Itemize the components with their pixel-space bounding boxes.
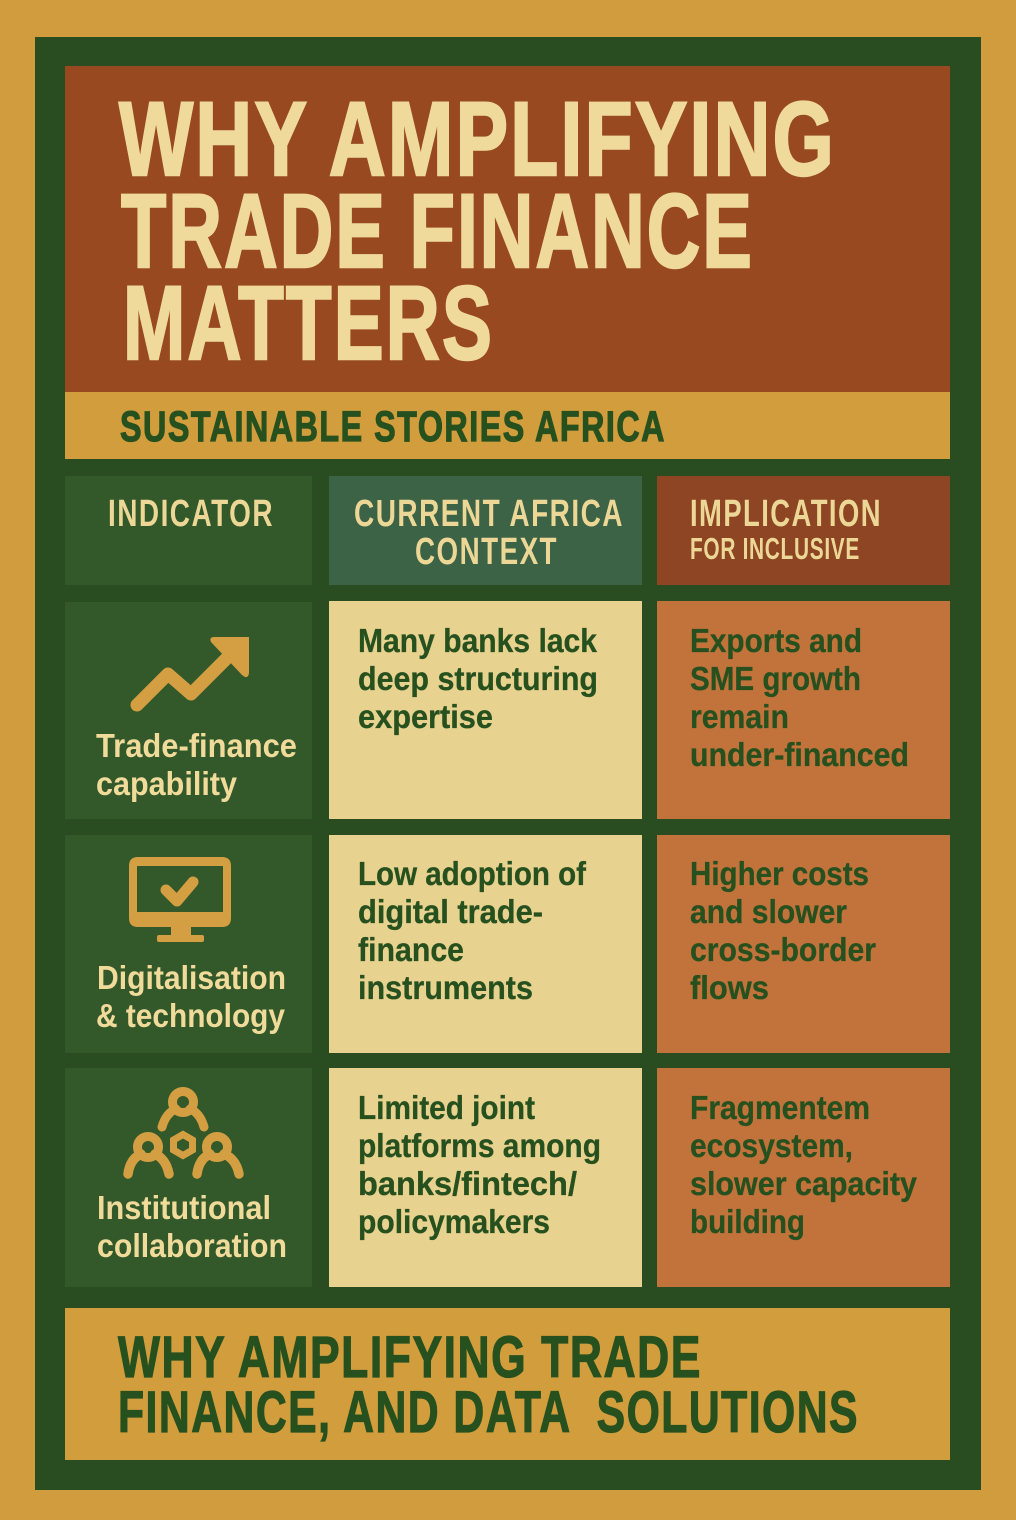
row 1 implication: Exports and [690, 622, 862, 659]
table header: current Africa context: CONTEXT [415, 531, 558, 573]
row 3 context: banks/fintech/ [358, 1165, 577, 1202]
icon: monitor with check [129, 857, 231, 942]
row 1 implication: remain [690, 698, 789, 735]
label [96, 959, 286, 1034]
row 1 implication [657, 601, 950, 819]
row 3 context: policymakers [358, 1203, 550, 1240]
row 1 indicator: trade-finance capability [65, 602, 312, 819]
subtitle: SUSTAINABLE STORIES AFRICA [120, 403, 666, 451]
row 1 implication: SME growth [690, 660, 861, 697]
table header: current Africa context: CURRENT AFRICA [354, 493, 624, 535]
label [97, 1189, 287, 1264]
label: Digitalisation [97, 959, 286, 996]
table header: implication: FOR INCLUSIVE [690, 531, 860, 566]
label [96, 727, 297, 802]
row 2 context: finance [358, 931, 464, 968]
row 1 implication: under-financed [690, 736, 909, 773]
table header: implication [657, 476, 950, 585]
footer heading: WHY AMPLIFYING TRADE [118, 1325, 702, 1390]
table header: implication: IMPLICATION [690, 493, 882, 535]
table header: current Africa context [329, 476, 642, 585]
row 2 context: instruments [358, 969, 533, 1006]
row 3 indicator: institutional collaboration [65, 1068, 312, 1287]
icon: rising arrow [137, 637, 249, 705]
row 3 implication [657, 1068, 950, 1287]
panel: title banner [65, 66, 950, 392]
row 1 context: expertise [358, 698, 493, 735]
row 2 implication [657, 835, 950, 1053]
footer heading [118, 1325, 859, 1445]
table header: indicator: INDICATOR [108, 493, 274, 535]
row 3 implication: ecosystem, [690, 1127, 853, 1164]
title: MATTERS [123, 265, 494, 382]
label: collaboration [97, 1227, 287, 1264]
panel: subtitle band [65, 392, 950, 459]
row 3 context: Limited joint [358, 1089, 535, 1126]
row 3 implication: slower capacity [690, 1165, 918, 1202]
label: Trade-finance [96, 727, 297, 764]
label: & technology [96, 997, 286, 1034]
row 3 context [329, 1068, 642, 1287]
row 2 context: Low adoption of [358, 855, 587, 892]
row 2 indicator: digitalisation and technology [65, 835, 312, 1053]
row 2 implication: flows [690, 969, 769, 1006]
row 2 implication: Higher costs [690, 855, 869, 892]
label: capability [96, 765, 238, 802]
icon: three people around a gear [128, 1092, 239, 1174]
table header: indicator [65, 476, 312, 585]
row 3 implication: Fragmentem [690, 1089, 870, 1126]
row 2 context [329, 835, 642, 1053]
row 2 context: digital trade- [358, 893, 543, 930]
panel: footer banner [65, 1308, 950, 1460]
title [119, 81, 836, 382]
row 2 implication: cross-border [690, 931, 876, 968]
title: TRADE FINANCE [121, 173, 754, 290]
row 2 implication: and slower [690, 893, 847, 930]
row 3 context: platforms among [358, 1127, 601, 1164]
row 1 context: Many banks lack [358, 622, 598, 659]
label: Institutional [97, 1189, 271, 1226]
row 1 context [329, 601, 642, 819]
row 1 context: deep structuring [358, 660, 598, 697]
row 3 implication: building [690, 1203, 805, 1240]
